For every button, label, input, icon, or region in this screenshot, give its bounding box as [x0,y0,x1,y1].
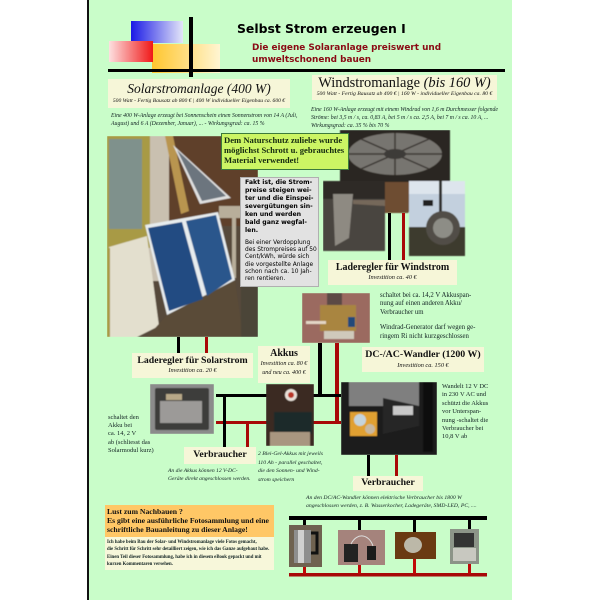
wind price line: 500 Watt - Fertig Bausatz ab 400 € | 160 W - individueller Eigenbau ca. 80 € [317,91,492,97]
text: solar controller note: ab (schliesst das [108,439,150,446]
logo: coloured squares [109,17,220,77]
wires: wind [388,213,405,260]
Fakt bold text: ter und die Einspei- [245,195,313,202]
Fakt small text [245,239,317,282]
Fakt bold text: severgütungen sin- [245,203,313,210]
orange heading: Es gibt eine ausführliche Fotosammlung und eine [107,516,269,525]
text: DC consumers [168,468,251,482]
orange heading: schriftliche Bauanleitung zu dieser Anlage! [107,525,248,534]
label: Verbraucher left [184,447,256,464]
text: solar controller note: ca. 14, 2 V [108,430,136,437]
text: inverter note: nung -schaltet die [442,417,488,424]
text: AC consumers [306,495,477,509]
callout: Fakt ist [240,177,319,287]
panel: Windstromanlage [312,75,497,100]
text: AC consumers: An den DC/AC-Wandler können elektrische Verbraucher bis 1800 W [306,495,462,501]
text: wind controller note: schaltet bei ca. 14,2 V Akkuspan- [380,292,471,299]
text: battery note [258,451,323,483]
subtitle: umweltschonend bauen [252,54,371,64]
photo: wind wheel [323,130,466,257]
wind description [311,106,498,129]
header rule [108,69,505,72]
Fakt small text: des Strompreises auf 50 [245,247,317,253]
text: solar controller note: schaltet den [108,414,139,421]
orange heading: Lust zum Nachbauen ? [107,507,183,516]
Fakt bold text: ken und werden [245,211,301,218]
icon: laptop [450,529,479,564]
label: Verbraucher right [353,476,423,491]
subtitle [252,43,441,64]
text: inverter note: schützt die Akkus [442,400,488,407]
panel: Solarstromanlage [108,79,290,108]
text: wind controller note: nung auf einen anderen Akku/ [380,300,462,307]
text: AC consumers: angeschlossen werden, z. B. Wasserkocher, Ladegeräte, SMD-LED, PC, .... [306,503,477,509]
subtitle: Die eigene Solaranlage preiswert und [252,43,441,53]
label: Laderegler Windstrom [328,260,457,285]
body text: Einen Teil dieser Fotosammlung, habe ich in diesem eBook gepackt und mit [107,555,262,560]
heading: solar: Solarstromanlage (400 W) [127,81,271,96]
orange heading [105,505,274,537]
Fakt bold text: len. [245,227,258,234]
label: Laderegler Windstrom: Investition ca. 40 € [368,274,417,281]
consumer bus diagram [289,516,487,576]
callout: Naturschutz: möglichst Schrott u. gebrauchtes [224,145,344,155]
text: wind controller note [380,292,476,340]
icon: LED lamp [395,532,436,559]
body text [107,540,270,567]
text: inverter note: Verbraucher bei [442,425,483,432]
text: inverter note: in 230 V AC und [442,391,486,398]
body text: kurzen Kommentaren versehen. [107,562,173,567]
text: battery note: die den Sonnen- und Wind- [258,468,320,474]
label: DC/AC-Wandler: DC-/AC-Wandler (1200 W) [365,349,481,360]
text: wind controller note: Verbraucher um [380,309,424,316]
text: DC consumers: An die Akkus können 12 V-DC- [168,468,238,474]
callout: Naturschutz [221,133,349,170]
photo: wind controller [302,293,370,343]
label: Laderegler Solarstrom [132,353,253,378]
page background [87,0,512,600]
icon: kettle [289,525,322,567]
title: Selbst Strom erzeugen I [237,21,406,36]
wind description: Wirkungsgrad: ca. 35 % bis 70 % [311,123,389,129]
wires: solar controller to consumer [223,397,249,447]
text: battery note: 2 Blei-Gel-Akkus mit jeweils [258,451,323,457]
Fakt bold text: bald ganz wegfal- [245,219,307,226]
Fakt bold text [245,179,314,234]
photo: solar controller [150,384,214,434]
heading: wind: Windstromanlage (bis 160 W) [318,75,491,91]
solar description: August) und 6 A (Dezember, Januar), ... - Wirkungsgrad: ca. 15 % [111,121,265,127]
photo: inverter [341,382,437,455]
text: solar controller note: Akku bei [108,422,132,429]
text: battery note: 110 Ah - parallel geschaltet, [258,460,322,466]
icon: cables and charger [338,530,385,565]
label: Akkus: Investition ca. 80 € [261,361,307,367]
wires: solar to controller [177,337,208,353]
label: Laderegler Solarstrom: Laderegler für Solarstrom [137,355,248,366]
text: solar controller note: Solarmodul kurz) [108,447,154,454]
Fakt small text: ren rentieren. [245,276,285,282]
label: Akkus: Akkus [270,348,298,359]
callout: Naturschutz: Dem Naturschutz zuliebe wurde [224,135,342,145]
label: DC/AC-Wandler: Investition ca. 150 € [397,362,449,369]
Fakt bold text: preise steigen wei- [245,187,312,194]
Fakt small text: die vorgestellte Anlage [245,262,313,268]
label: Akkus: und neu ca. 400 € [262,370,306,376]
label: Verbraucher right: Verbraucher [361,477,415,488]
callout: Naturschutz: Material verwendet! [224,155,299,165]
wires: central bus [216,343,341,424]
text: wind controller note: ringem Ri nicht kurzgeschlossen [380,333,469,340]
wind description: Ströme: bei 3,5 m / s, ca. 0,83 A, bei 5 m / s ca. 2,5 A, bei 7 m / s ca. 10 A, ... [311,115,488,121]
solar price line: 500 Watt - Fertig Bausatz ab 800 € | 400 W individueller Eigenbau ca. 600 € [113,98,285,104]
text: solar controller note [108,414,154,454]
label: Verbraucher left: Verbraucher [193,449,247,460]
text: inverter note: 10,8 V ab [442,433,467,440]
text: DC consumers: Geräte direkt angeschlossen werden. [168,476,251,482]
text: wind controller note: Windrad-Generator darf wegen ge- [380,324,475,331]
body text: Ich habe beim Bau der Solar- und Windstromanlage viele Fotos gemacht, [107,540,257,545]
text: battery note: strom speichern [258,477,294,483]
panel: Nachbauen [105,505,274,570]
body text: die Schritt für Schritt sehr detailliert zeigen, wie ich das Ganze aufgebaut habe. [107,547,269,552]
Fakt bold text: Fakt ist, die Strom- [245,179,312,186]
label: Laderegler Windstrom: Laderegler für Windstrom [336,262,449,273]
solar description: Eine 400 W-Anlage erzeugt bei Sonnenschein einen Sonnenstrom von 14 A (Juli, [111,113,297,119]
text: inverter note: Wandelt 12 V DC [442,383,488,390]
solar description [110,112,298,127]
text: inverter note [442,383,488,440]
wires: inverter to consumer [367,455,398,476]
label: DC/AC-Wandler [362,347,484,372]
text: inverter note: vor Unterspan- [442,408,481,415]
photo: solar panels on balcony [107,136,258,337]
wind description: Eine 160 W-Anlage erzeugt mit einem Windrad von 1,6 m Durchmesser folgende [311,107,498,113]
Fakt small text: Cent/kWh, würde sich [245,254,309,260]
label: Laderegler Solarstrom: Investition ca. 20 € [168,367,217,374]
Fakt small text: schon nach ca. 10 Jah- [245,269,312,275]
label: Akkus [258,346,310,383]
Fakt small text: Bei einer Verdopplung [245,240,310,246]
photo: batteries [266,384,314,446]
